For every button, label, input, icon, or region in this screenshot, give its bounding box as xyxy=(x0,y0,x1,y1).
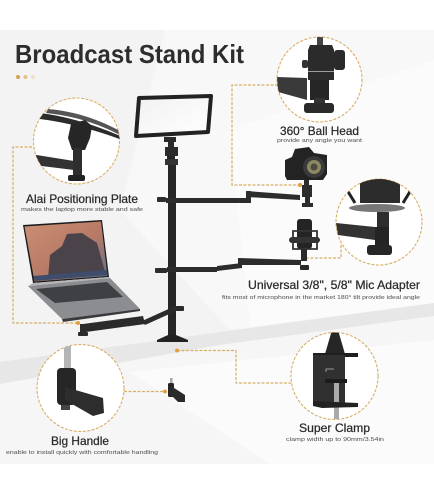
decorative title dots xyxy=(16,75,35,79)
label: big handle xyxy=(6,434,158,456)
label: mic adapter xyxy=(222,278,420,301)
detail circle: alai plate xyxy=(30,98,125,184)
stand with light xyxy=(78,96,301,342)
label: big handle: enable to install quickly with comfortable handling xyxy=(6,450,158,456)
upper arm xyxy=(157,191,300,203)
label: big handle: Big Handle xyxy=(51,434,109,448)
detail circle: super clamp xyxy=(291,330,378,420)
label: 360 ball head xyxy=(277,124,363,144)
label: alai positioning plate: makes the laptop more stable and safe xyxy=(21,207,143,213)
camera xyxy=(285,147,327,180)
camera ball mount xyxy=(302,180,313,207)
light ball mount xyxy=(164,137,178,156)
detail circle: big handle xyxy=(37,344,124,432)
title: Broadcast Stand Kit xyxy=(15,39,244,69)
label: super clamp xyxy=(286,421,384,443)
label: alai positioning plate: Alai Positioning Plate xyxy=(26,192,138,206)
label: super clamp: clamp width up to 90mm/3.54in xyxy=(286,437,384,443)
connector: super clamp xyxy=(175,348,291,383)
laptop xyxy=(23,220,140,322)
connector: ball head xyxy=(232,85,302,187)
label: mic adapter: fits most of microphone in the market 180° tilt provide ideal angle xyxy=(222,295,420,301)
connector: alai plate xyxy=(13,147,80,325)
led light panel xyxy=(136,96,211,136)
label: super clamp: Super Clamp xyxy=(299,421,370,435)
laptop screen xyxy=(24,222,108,282)
label: 360 ball head: provide any angle you want xyxy=(277,138,363,144)
connector: big handle xyxy=(124,390,167,394)
connector: mic adapter xyxy=(302,245,341,260)
detail circle: mic adapter xyxy=(336,178,422,265)
detail circle: ball head xyxy=(277,37,362,122)
small big handle xyxy=(168,378,185,402)
pole xyxy=(167,156,176,335)
label: alai positioning plate xyxy=(21,192,143,213)
middle arm xyxy=(155,258,301,273)
laptop base xyxy=(28,278,140,319)
label: 360 ball head: 360° Ball Head xyxy=(280,124,359,138)
label: mic adapter: Universal 3/8", 5/8" Mic Adapter xyxy=(248,278,420,292)
lower arm xyxy=(78,306,184,336)
base xyxy=(157,335,188,342)
microphone with shock mount xyxy=(289,219,320,270)
